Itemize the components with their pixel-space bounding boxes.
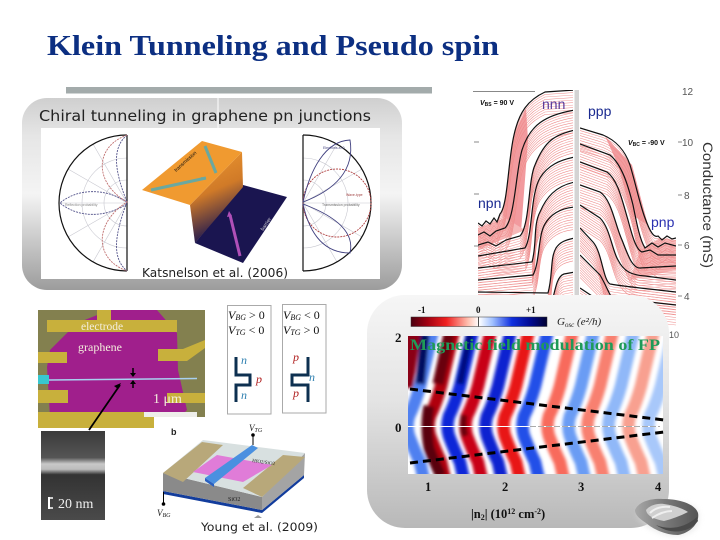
colorbar: -1 xyxy=(418,305,426,315)
gate conditions: V xyxy=(283,308,292,322)
panel heading: Chiral tunneling in graphene pn junctions xyxy=(39,107,371,125)
right plot captions xyxy=(322,146,363,207)
y axis labels xyxy=(395,330,402,435)
arrow: to TEM inset xyxy=(89,383,121,430)
dashed boundary lines xyxy=(410,389,664,420)
micrograph labels: graphene xyxy=(78,340,122,354)
x axis title: |n xyxy=(471,507,481,521)
heatmap centre line xyxy=(408,426,660,428)
axis ticks xyxy=(474,142,682,296)
curve region labels: npn xyxy=(478,195,501,211)
schematic labels: V xyxy=(157,508,162,518)
inset: TEM image xyxy=(41,431,105,520)
gate conditions: V xyxy=(228,323,237,337)
micrograph labels: electrode xyxy=(81,321,123,333)
title: Klein Tunneling and Pseudo spin xyxy=(47,30,499,62)
scale bar xyxy=(144,412,197,417)
right curve set xyxy=(580,128,676,334)
right plot captions: Transmission probability xyxy=(322,203,360,207)
chart axis label overlap: 10 xyxy=(669,330,679,340)
panel: chiral tunneling xyxy=(22,98,402,290)
logo: mobius strip xyxy=(635,499,699,536)
schematic labels: V xyxy=(249,423,254,433)
gate conditions: BG xyxy=(290,313,301,322)
x axis labels: 4 xyxy=(655,480,662,494)
citation: Young et al. (2009) xyxy=(200,520,318,534)
heatmap title: Magnetic field modulation of FP xyxy=(410,337,661,354)
schematic labels: b xyxy=(171,427,177,437)
micrograph labels: 1 μm xyxy=(153,392,182,407)
potential step 3D: transmission xyxy=(173,150,198,173)
junction symbol xyxy=(292,357,308,402)
panel: conductance chart xyxy=(473,87,716,334)
gate voltage labels: V xyxy=(628,140,634,147)
axis title: Conductance (mS) xyxy=(700,142,716,268)
right plot captions: Wave-type xyxy=(346,193,363,197)
carrier labels xyxy=(241,353,262,402)
gate conditions: V xyxy=(228,308,237,322)
title underline bar xyxy=(66,87,432,94)
x axis title: ) xyxy=(541,507,545,521)
curve region labels: pnp xyxy=(651,214,675,230)
colorbar unit: (e²/h) xyxy=(574,316,601,328)
gate voltage labels: BC xyxy=(633,142,640,148)
y axis labels: 0 xyxy=(395,420,402,435)
right plot captions: Electrons a=0 xyxy=(323,146,345,150)
x axis title: 12 xyxy=(507,507,515,516)
carrier labels: p xyxy=(292,386,299,400)
x axis title: cm xyxy=(515,507,535,521)
gate voltage labels: = 90 V xyxy=(492,100,514,107)
gate conditions: TG xyxy=(290,328,301,337)
axis numbers xyxy=(682,87,694,303)
carrier labels: n xyxy=(241,353,247,367)
gate conditions: < 0 xyxy=(246,323,264,337)
inset: TEM image: 20 nm xyxy=(58,497,94,512)
micrograph labels xyxy=(78,321,182,407)
carrier labels: n xyxy=(241,388,247,402)
figure background xyxy=(41,128,380,279)
junction symbol xyxy=(236,357,250,402)
schematic labels: TG xyxy=(254,428,263,434)
gate conditions: > 0 xyxy=(301,323,319,337)
heatmap xyxy=(408,336,663,474)
width arrows xyxy=(132,368,134,388)
x axis title: | (10 xyxy=(485,507,507,521)
colorbar xyxy=(411,305,547,326)
top gate wire xyxy=(38,375,49,384)
gate conditions: BG xyxy=(235,313,246,322)
x axis labels: 2 xyxy=(502,480,508,494)
left curve set xyxy=(478,90,573,295)
gate voltage labels: V xyxy=(480,100,486,107)
colorbar: 0 xyxy=(476,305,481,315)
right polar plot xyxy=(303,135,371,271)
left polar plot xyxy=(59,135,127,271)
schematic labels: HfO2/SiO2 xyxy=(252,459,276,467)
colorbar: +1 xyxy=(526,305,536,315)
gate voltage labels xyxy=(480,100,665,148)
gate conditions: TG xyxy=(235,328,246,337)
x axis labels: 1 xyxy=(425,480,431,494)
micrograph: graphene device xyxy=(38,310,205,428)
x axis title: 2 xyxy=(481,513,485,522)
gate conditions xyxy=(283,308,320,337)
schematic labels: SiO2 xyxy=(228,497,240,503)
panel: pnp gating xyxy=(282,304,326,413)
panel: npn gating xyxy=(228,306,271,414)
carrier labels: n xyxy=(309,370,315,384)
carrier labels: p xyxy=(292,350,299,364)
gate voltage labels: = -90 V xyxy=(640,140,665,147)
potential step 3D: barrier xyxy=(260,217,273,232)
schematic labels: BG xyxy=(162,513,171,519)
schematic labels xyxy=(157,423,276,519)
colorbar unit: osc xyxy=(565,321,575,329)
citation: Katsnelson et al. (2006) xyxy=(142,266,288,280)
x axis labels: 3 xyxy=(578,480,584,494)
x axis labels xyxy=(425,480,662,494)
gate conditions: < 0 xyxy=(301,308,320,322)
carrier labels xyxy=(292,350,315,400)
x axis title: -2 xyxy=(534,507,541,516)
colorbar unit: G xyxy=(557,316,565,328)
y axis labels: 2 xyxy=(395,330,402,345)
left plot caption: Reflection probability xyxy=(65,203,98,207)
gate conditions: V xyxy=(283,323,292,337)
panel: magnetic field modulation xyxy=(367,295,679,528)
axis numbers: 6 xyxy=(684,241,690,252)
potential step 3D xyxy=(142,141,287,263)
gate voltage labels: BS xyxy=(485,102,492,108)
carrier labels: p xyxy=(255,372,262,386)
axis numbers: 8 xyxy=(684,191,690,202)
axis numbers: 12 xyxy=(682,87,694,98)
curve region labels: nnn xyxy=(542,96,565,112)
chart divider xyxy=(574,90,579,295)
curve region labels xyxy=(478,96,675,230)
axis numbers: 4 xyxy=(684,292,690,303)
curve region labels: ppp xyxy=(588,103,612,119)
axis numbers: 10 xyxy=(682,138,694,149)
gate conditions xyxy=(228,308,265,337)
gate conditions: > 0 xyxy=(246,308,265,322)
device schematic xyxy=(157,423,318,534)
